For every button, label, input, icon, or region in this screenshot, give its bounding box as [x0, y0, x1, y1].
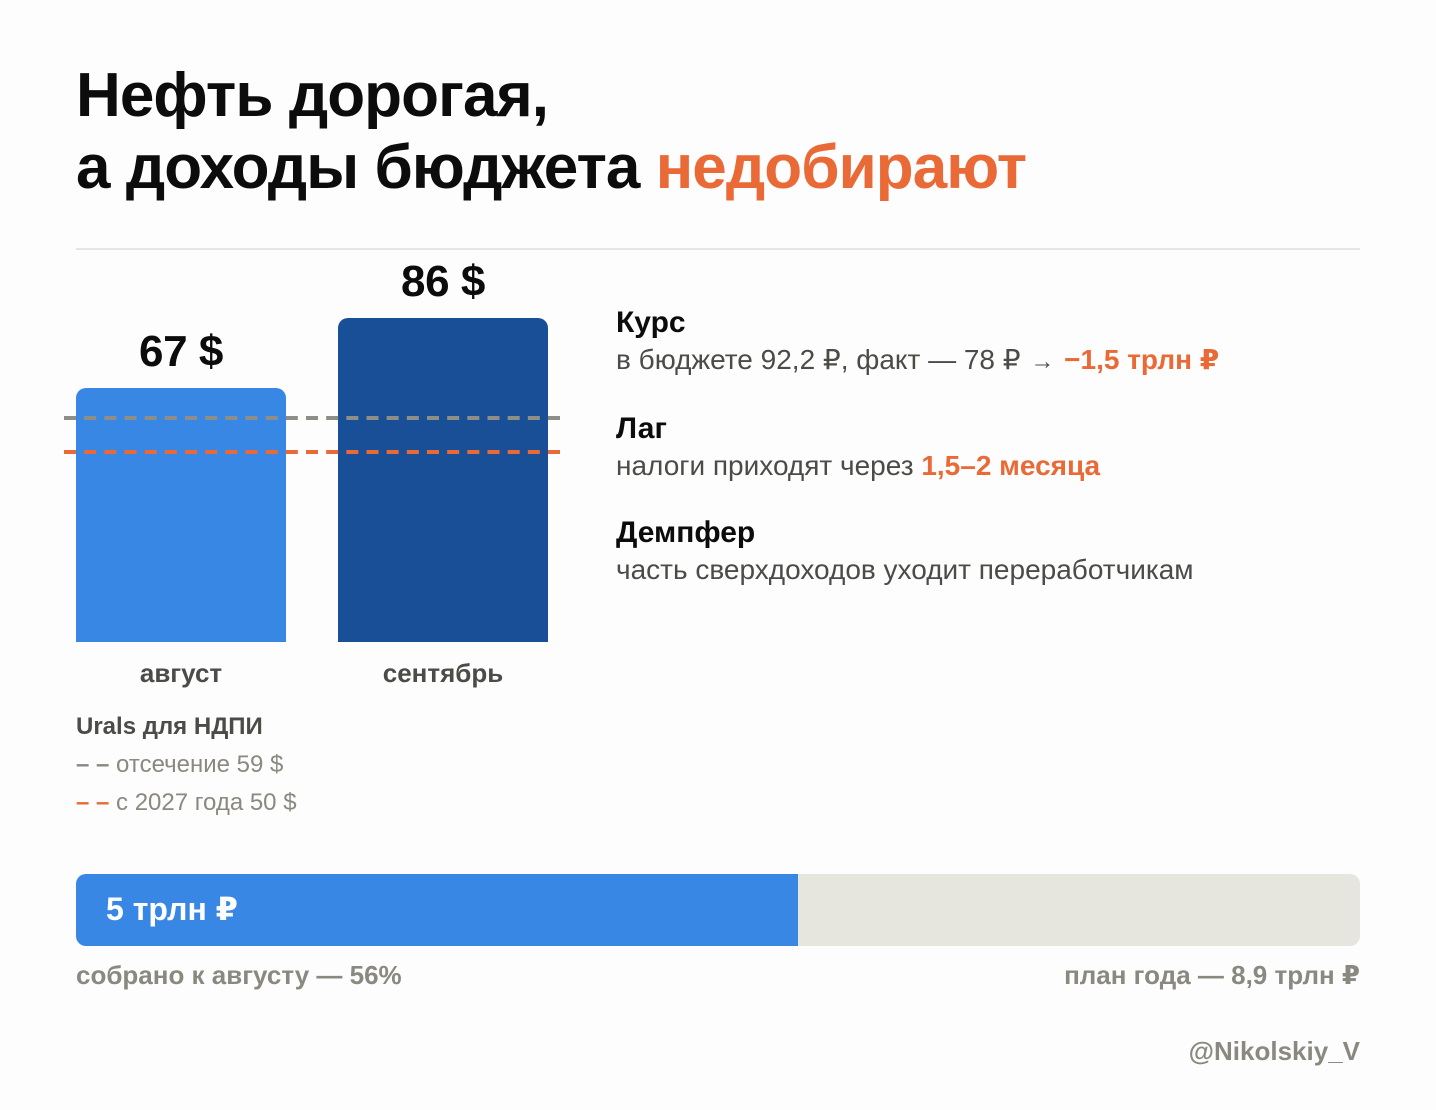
legend title: Urals для НДПИ — [76, 713, 263, 740]
factors — [616, 306, 1219, 585]
factor: lag — [616, 412, 1100, 481]
threshold lines — [64, 416, 560, 454]
divider — [76, 248, 1360, 250]
factor: damper — [616, 516, 1194, 585]
factor: lag: налоги приходят через 1,5–2 месяца — [616, 450, 1100, 481]
bar chart — [64, 257, 560, 688]
legend: cutoff: – – отсечение 59 $ — [76, 751, 283, 778]
legend: 2027: – – с 2027 года 50 $ — [76, 789, 297, 816]
label: august: август — [140, 658, 222, 688]
title: Нефть дорогая, — [76, 61, 548, 130]
factor: rate — [616, 306, 1219, 375]
factor: damper: Демпфер — [616, 516, 755, 549]
title — [76, 61, 1026, 202]
factor: lag: Лаг — [616, 412, 667, 445]
legend — [76, 713, 297, 816]
factor: rate: → — [1030, 348, 1054, 375]
bar: september — [338, 318, 548, 642]
factor: rate: Курс — [616, 306, 686, 339]
factor: rate: в бюджете 92,2 ₽, факт — 78 ₽ −1,5 трлн ₽ — [616, 344, 1219, 375]
author: @Nikolskiy_V — [1189, 1036, 1360, 1066]
value: september: 86 $ — [401, 257, 485, 306]
progress fill: 5 трлн ₽ — [106, 891, 238, 927]
value: august: 67 $ — [139, 327, 223, 376]
caption: collected: собрано к августу — 56% — [76, 960, 402, 990]
title: а доходы бюджета недобирают — [76, 133, 1026, 202]
label: september: сентябрь — [383, 658, 503, 688]
progress bar — [76, 874, 1360, 946]
bar: august — [76, 388, 286, 642]
factor: damper: часть сверхдоходов уходит переработчикам — [616, 554, 1194, 585]
caption: plan: план года — 8,9 трлн ₽ — [1064, 960, 1360, 990]
progress fill — [76, 874, 798, 946]
